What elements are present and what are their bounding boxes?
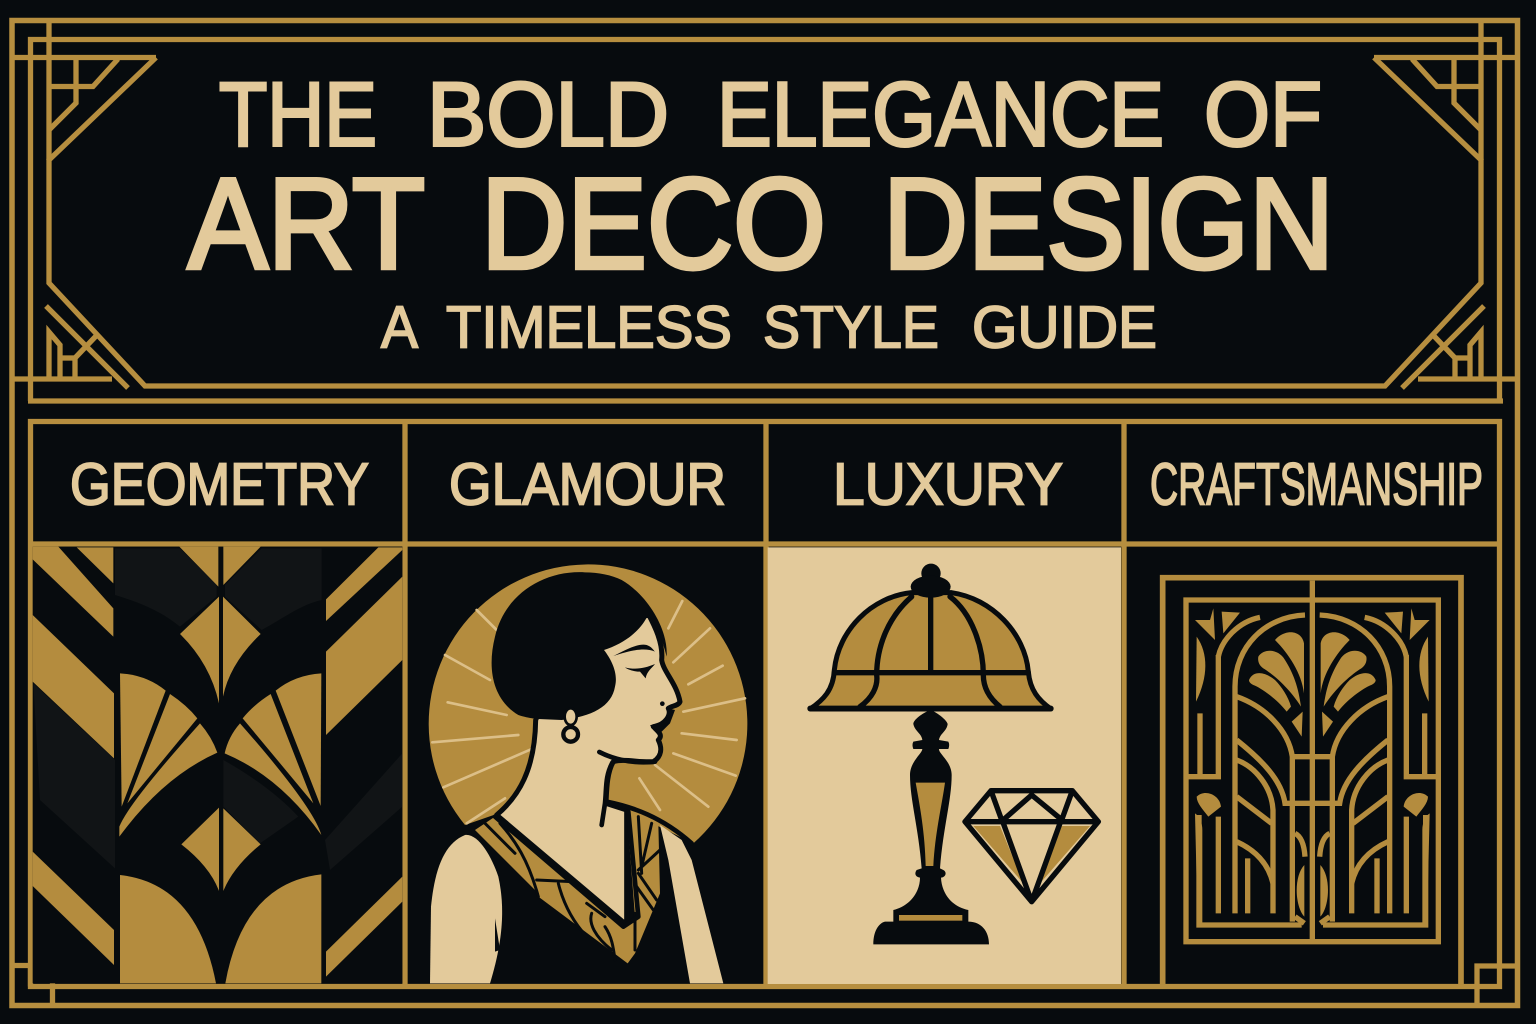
corner ornament: top left <box>49 58 118 130</box>
panel: glamour portrait <box>429 564 747 983</box>
necklace <box>475 810 660 963</box>
subtitle: GUIDE <box>972 294 1157 360</box>
right shoulder <box>660 825 723 983</box>
corner ornament: bottom right <box>1402 306 1518 388</box>
left fan <box>119 673 217 837</box>
finial <box>911 564 951 598</box>
door right half <box>1312 608 1436 925</box>
subtitle: TIMELESS <box>446 294 732 360</box>
title line one: OF <box>1204 64 1322 166</box>
title line two: ART <box>188 152 425 296</box>
subtitle: A <box>381 294 419 360</box>
bobbed hair <box>492 572 667 720</box>
subtitle: STYLE <box>763 294 939 360</box>
earring <box>563 708 578 742</box>
facial features <box>613 645 675 735</box>
panel: geometry pattern <box>33 547 402 983</box>
arm detail <box>495 918 500 952</box>
left side bars and arch <box>1188 615 1312 925</box>
title line two <box>188 152 1334 296</box>
lamp stem and base <box>873 710 989 944</box>
title line two: DESIGN <box>883 152 1334 296</box>
corner ornament: bottom left <box>12 306 128 388</box>
door left half <box>1188 608 1312 925</box>
stem inlays <box>899 783 962 921</box>
centre triangles and diamonds <box>179 547 261 891</box>
gold halo <box>429 564 747 843</box>
lamp shade <box>810 593 1051 709</box>
door frames <box>1163 578 1461 985</box>
right fan <box>225 673 321 835</box>
dark tonal patches <box>33 548 402 870</box>
title plaque outline <box>49 58 1481 386</box>
title line one: BOLD <box>427 64 669 166</box>
bottom arches <box>120 874 321 983</box>
left chevron stripes <box>33 547 114 965</box>
left fan petals <box>1195 608 1304 923</box>
panel: luxury <box>768 547 1121 984</box>
right chevron stripes <box>326 547 402 977</box>
title line one <box>219 64 1322 166</box>
diamond <box>965 791 1098 902</box>
subtitle <box>381 294 1157 360</box>
halo rays <box>432 601 745 823</box>
title line one: ELEGANCE <box>717 64 1164 166</box>
left shoulder <box>430 835 502 983</box>
title <box>188 64 1334 360</box>
neck lines <box>599 752 692 843</box>
column headings grid <box>12 422 1517 1005</box>
face, neck and chest <box>497 614 680 925</box>
heading: luxury: LUXURY <box>833 452 1063 518</box>
title line one: THE <box>219 64 377 166</box>
table lamp <box>810 564 1051 944</box>
heading: geometry: GEOMETRY <box>70 452 369 518</box>
corner ornament: top right <box>1412 58 1481 130</box>
heading: glamour: GLAMOUR <box>449 452 726 518</box>
shade ribs <box>810 597 1051 708</box>
panel: craftsmanship door <box>1163 578 1461 985</box>
title line two: DECO <box>481 152 826 296</box>
